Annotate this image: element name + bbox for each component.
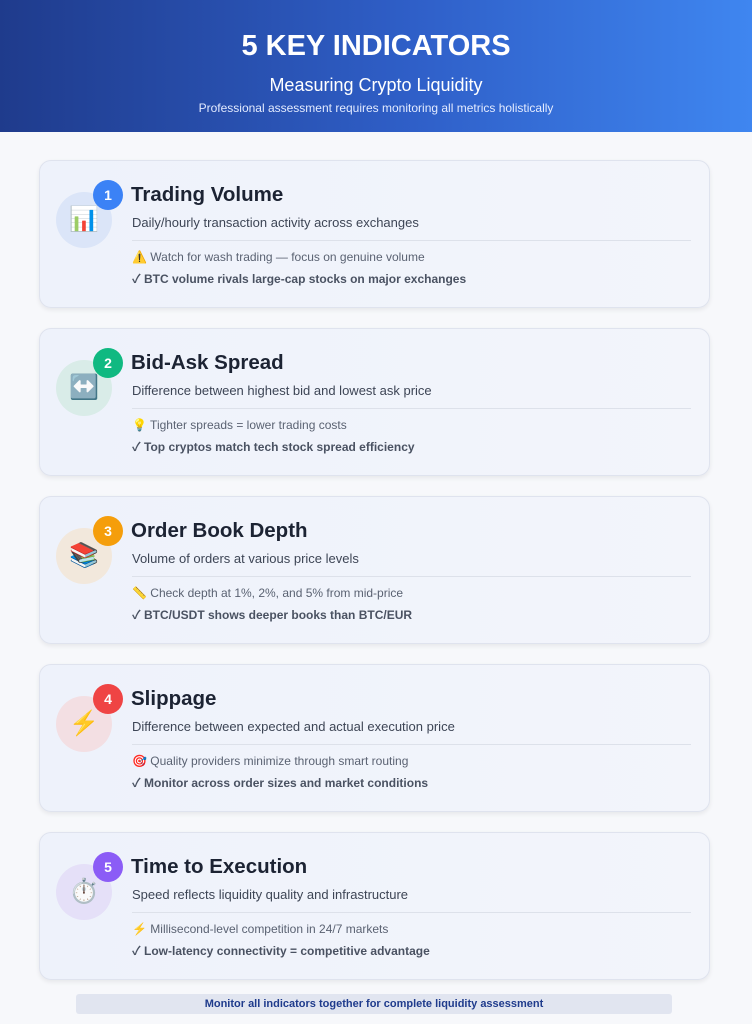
heading: Trading Volume [131,183,283,206]
heading: Order Book Depth [131,519,308,542]
badge 1 [93,180,123,210]
badge 2: 2 [104,355,112,371]
panel: slippage [39,664,710,812]
description: Difference between highest bid and lowest ask price [132,383,432,398]
badge 1: 1 [104,187,112,203]
heading: Bid-Ask Spread [131,351,284,374]
badge 4: 4 [104,691,112,707]
icon: bar chart: 📊 [69,206,99,233]
panel: order book depth [39,496,710,644]
panel: trading volume [39,160,710,308]
description: Difference between expected and actual execution price [132,719,455,734]
note: ⚡ Millisecond-level competition in 24/7 markets [132,922,388,936]
icon: books [56,528,112,584]
fact: ✓ Low-latency connectivity = competitive advantage [132,944,430,958]
badge 5: 5 [104,859,112,875]
description: Daily/hourly transaction activity across exchanges [132,215,419,230]
note: 🎯 Quality providers minimize through smart routing [132,754,408,768]
note: 💡 Tighter spreads = lower trading costs [132,418,347,432]
heading: Time to Execution [131,855,307,878]
subtitle: Measuring Crypto Liquidity [269,75,483,95]
icon: books: 📚 [69,542,99,569]
footer banner: Monitor all indicators together for complete liquidity assessment [205,998,543,1010]
icon: lightning [56,696,112,752]
icon: lightning: ⚡ [69,710,99,737]
description: Volume of orders at various price levels [132,551,359,566]
fact: ✓ BTC volume rivals large-cap stocks on major exchanges [132,272,466,286]
icon: stopwatch [56,864,112,920]
badge 3 [93,516,123,546]
badge 2 [93,348,123,378]
fact: ✓ Top cryptos match tech stock spread efficiency [132,440,415,454]
tagline: Professional assessment requires monitoring all metrics holistically [199,101,553,115]
icon: stopwatch: ⏱️ [69,878,99,905]
panel: bid-ask spread [39,328,710,476]
title: 5 KEY INDICATORS [241,30,511,62]
note: ⚠️ Watch for wash trading — focus on genuine volume [132,250,425,264]
fact: ✓ Monitor across order sizes and market conditions [132,776,428,790]
badge 5 [93,852,123,882]
heading: Slippage [131,687,216,710]
icon: bar chart [56,192,112,248]
description: Speed reflects liquidity quality and infrastructure [132,887,408,902]
fact: ✓ BTC/USDT shows deeper books than BTC/EUR [132,608,412,622]
header [0,0,752,132]
badge 3: 3 [104,523,112,539]
panel: time to execution [39,832,710,980]
badge 4 [93,684,123,714]
note: 📏 Check depth at 1%, 2%, and 5% from mid-price [132,586,403,600]
icon: arrows: ↔️ [69,374,99,401]
footer banner [76,994,672,1014]
icon: arrows [56,360,112,416]
